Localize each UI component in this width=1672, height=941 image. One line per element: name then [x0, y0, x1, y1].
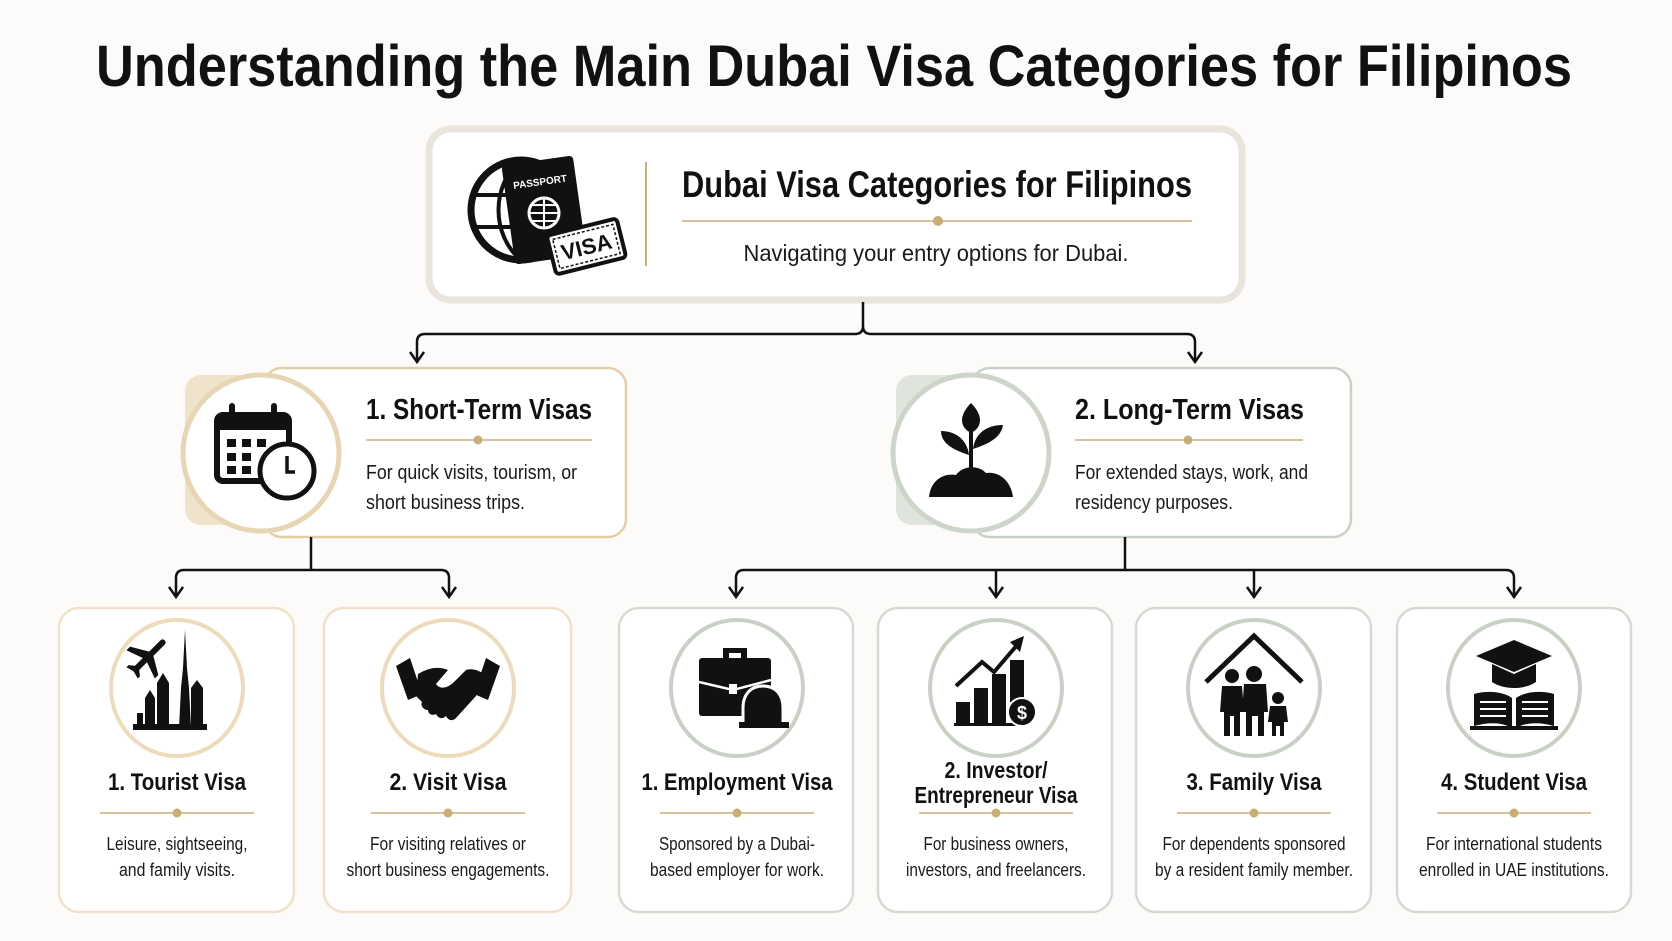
card: family visa	[1136, 608, 1371, 912]
icon: passport and visa: VISA	[559, 229, 615, 265]
arrow: top connector	[410, 302, 1202, 362]
text: short-term desc: For quick visits, tourism, or	[366, 462, 577, 484]
card: investor visa: Entrepreneur Visa	[914, 782, 1078, 808]
panel: top overview	[429, 129, 1242, 300]
arrow: short-term connector	[169, 537, 456, 597]
arrow: long-term connector	[729, 537, 1521, 597]
text: investor desc: For business owners,	[924, 834, 1068, 854]
icon: handshake	[396, 658, 500, 720]
card: family visa: by a resident family member.	[1155, 860, 1353, 880]
card: student visa	[1397, 608, 1631, 912]
icon: family house	[1206, 636, 1302, 736]
icon: calendar clock	[217, 403, 314, 498]
icon: passport and visa	[471, 155, 626, 275]
heading: short-term: 1. Short-Term Visas	[366, 394, 592, 426]
panel: short-term visas	[183, 368, 626, 537]
heading: employment: 1. Employment Visa	[642, 769, 833, 796]
heading: investor: 2. Investor/	[944, 757, 1048, 783]
icon: growth chart	[954, 636, 1036, 726]
card: investor visa	[878, 608, 1112, 912]
panel: short-term visas: short business trips.	[366, 492, 525, 514]
text: visit desc: For visiting relatives or	[370, 834, 526, 854]
icon: growth chart: $	[1017, 703, 1027, 723]
icon: sprout	[929, 403, 1013, 497]
panel: long-term visas: residency purposes.	[1075, 492, 1233, 514]
card: tourist visa	[59, 608, 294, 912]
card: tourist visa: and family visits.	[119, 860, 235, 880]
heading: visit: 2. Visit Visa	[390, 769, 507, 796]
icon: passport and visa: PASSPORT	[513, 174, 568, 192]
card: investor visa: investors, and freelancers.	[906, 860, 1086, 880]
heading: long-term: 2. Long-Term Visas	[1075, 394, 1304, 426]
heading: family: 3. Family Visa	[1186, 769, 1322, 796]
card: employment visa: based employer for work.	[650, 860, 824, 880]
heading: student: 4. Student Visa	[1441, 769, 1588, 796]
text: employment desc: Sponsored by a Dubai-	[659, 834, 815, 854]
text: long-term desc: For extended stays, work, and	[1075, 462, 1308, 484]
subtitle: Navigating your entry options for Dubai.	[744, 240, 1128, 266]
icon: graduation cap and book	[1470, 640, 1558, 730]
icon: plane and skyline	[118, 626, 207, 730]
heading: tourist: 1. Tourist Visa	[108, 769, 247, 796]
card: visit visa: short business engagements.	[346, 860, 550, 880]
card: employment visa	[619, 608, 853, 912]
text: student desc: For international students	[1426, 834, 1602, 854]
card: student visa: enrolled in UAE institutions.	[1419, 860, 1609, 880]
text: tourist desc: Leisure, sightseeing,	[106, 834, 248, 854]
panel: long-term visas	[893, 368, 1351, 537]
icon: briefcase and helmet	[699, 648, 789, 728]
card: visit visa	[324, 608, 571, 912]
text: family desc: For dependents sponsored	[1162, 834, 1346, 854]
heading: top: Dubai Visa Categories for Filipinos	[682, 164, 1192, 205]
